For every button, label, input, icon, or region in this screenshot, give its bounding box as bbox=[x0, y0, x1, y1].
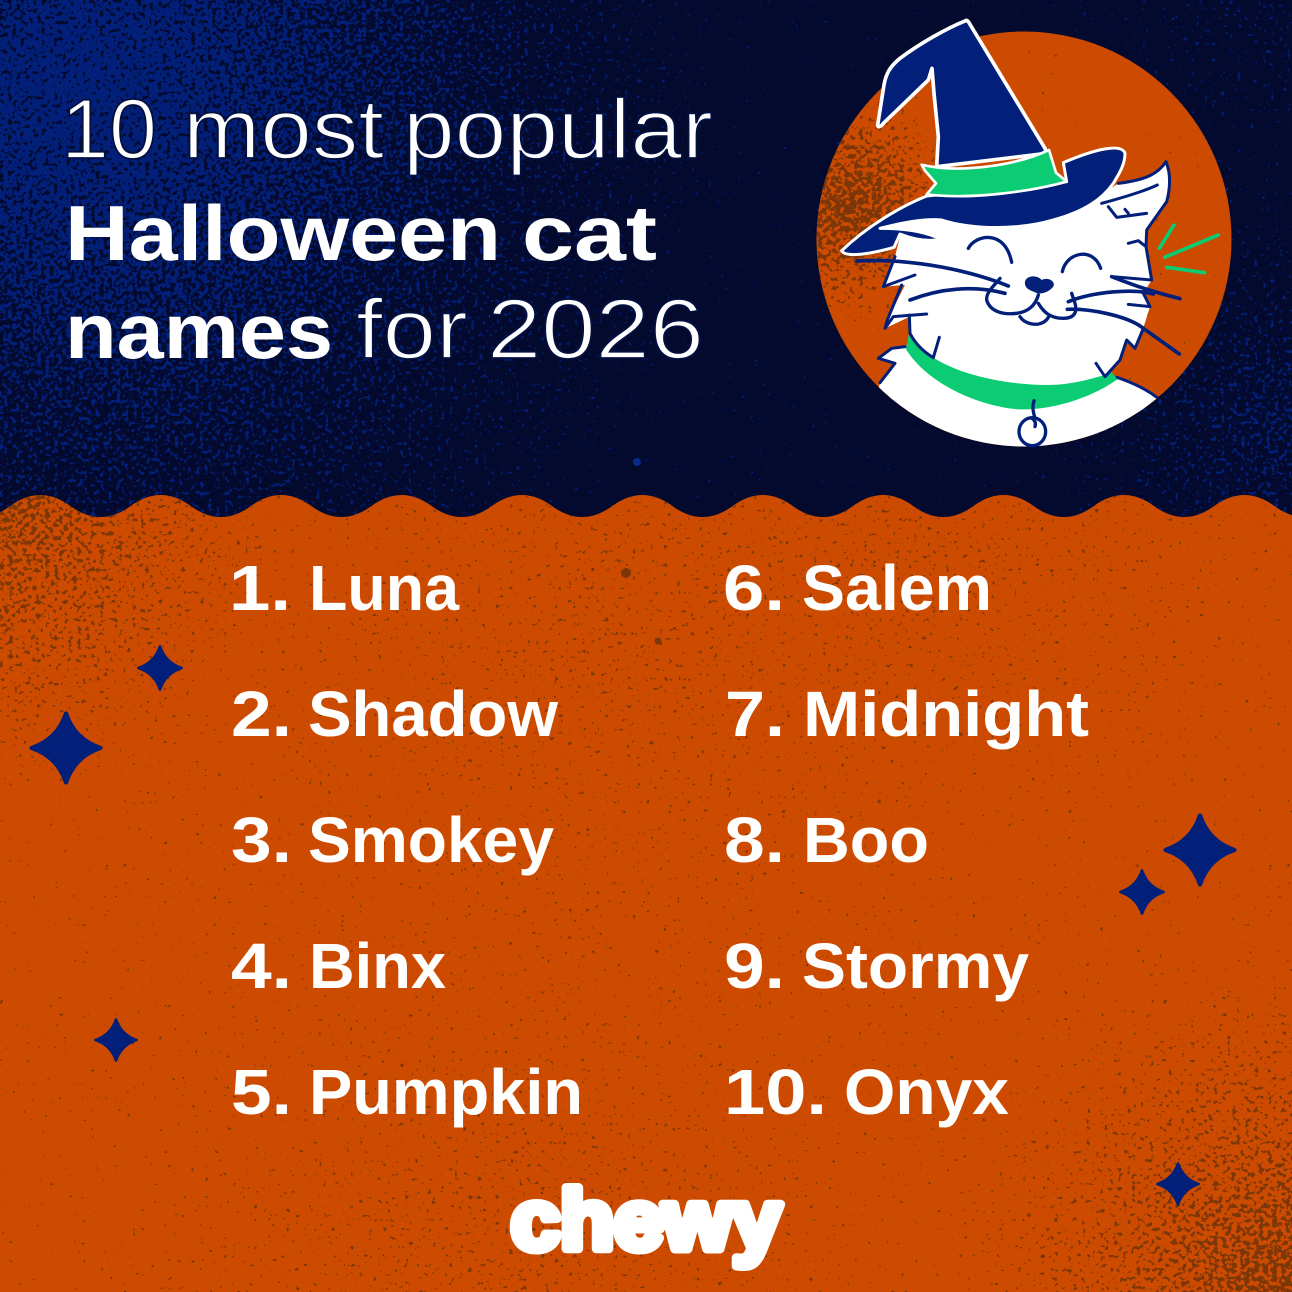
sky blue speckle texture bbox=[0, 0, 1292, 530]
list: names 1 to 5 bbox=[229, 552, 583, 1128]
list: names 1 to 5: Luna bbox=[309, 552, 459, 624]
whiskers bbox=[857, 261, 1180, 354]
title: names bbox=[65, 287, 333, 375]
title bbox=[61, 82, 713, 376]
orange circle bbox=[816, 32, 1232, 446]
night sky background bbox=[0, 0, 1292, 530]
list: names 1 to 5: Shadow bbox=[308, 678, 558, 750]
title: cat bbox=[522, 189, 657, 277]
list: names 6 to 10: 6. bbox=[723, 552, 785, 624]
title: most bbox=[183, 82, 384, 176]
title: Halloween bbox=[65, 189, 501, 277]
list: names 6 to 10: 7. bbox=[725, 678, 785, 750]
orange ground brown speckle texture bbox=[0, 490, 1292, 1292]
title: 10 bbox=[61, 82, 157, 176]
list: names 1 to 5: Binx bbox=[309, 930, 446, 1002]
witch hat cone bbox=[878, 20, 1047, 167]
list: names 6 to 10: Boo bbox=[803, 804, 929, 876]
title: popular bbox=[403, 82, 713, 176]
list: names 1 to 5: 3. bbox=[231, 804, 292, 876]
list: names 1 to 5: 2. bbox=[231, 678, 292, 750]
cat body bbox=[876, 345, 1158, 446]
eyes bbox=[968, 237, 1101, 272]
collar tag bbox=[1019, 401, 1046, 446]
list: names 6 to 10: 8. bbox=[724, 804, 785, 876]
sparkle stars bbox=[32, 646, 1234, 1205]
illustration: witch cat in orange circle bbox=[816, 20, 1232, 477]
mouth bbox=[987, 278, 1076, 324]
list: names 1 to 5: Smokey bbox=[308, 804, 554, 876]
list: names 1 to 5: 5. bbox=[231, 1056, 292, 1128]
list: names 1 to 5: 1. bbox=[229, 552, 291, 624]
orange ground with wavy top edge bbox=[0, 495, 1292, 1292]
list: names 6 to 10: 9. bbox=[724, 930, 785, 1002]
list: names 6 to 10: Stormy bbox=[802, 930, 1029, 1002]
green sparkle lines bbox=[1159, 225, 1218, 273]
hat brim bbox=[842, 148, 1125, 255]
cat head bbox=[883, 162, 1170, 385]
list: names 6 to 10 bbox=[723, 552, 1089, 1128]
logo: chewy: chewy bbox=[511, 1173, 781, 1267]
circle shaded speckle bbox=[816, 34, 1230, 380]
title: for bbox=[356, 282, 468, 376]
list: names 1 to 5: Pumpkin bbox=[309, 1056, 583, 1128]
list: names 6 to 10: Onyx bbox=[844, 1056, 1009, 1128]
head fur outline bbox=[883, 162, 1170, 377]
green collar bbox=[906, 335, 1117, 409]
list: names 6 to 10: Salem bbox=[802, 552, 992, 624]
list: names 6 to 10: 10. bbox=[724, 1056, 827, 1128]
nose bbox=[1025, 276, 1054, 293]
list: names 6 to 10: Midnight bbox=[803, 678, 1089, 750]
list: names 1 to 5: 4. bbox=[231, 930, 292, 1002]
hat green band bbox=[922, 150, 1067, 196]
cat drawing bbox=[842, 20, 1218, 477]
title: 2026 bbox=[487, 282, 704, 376]
